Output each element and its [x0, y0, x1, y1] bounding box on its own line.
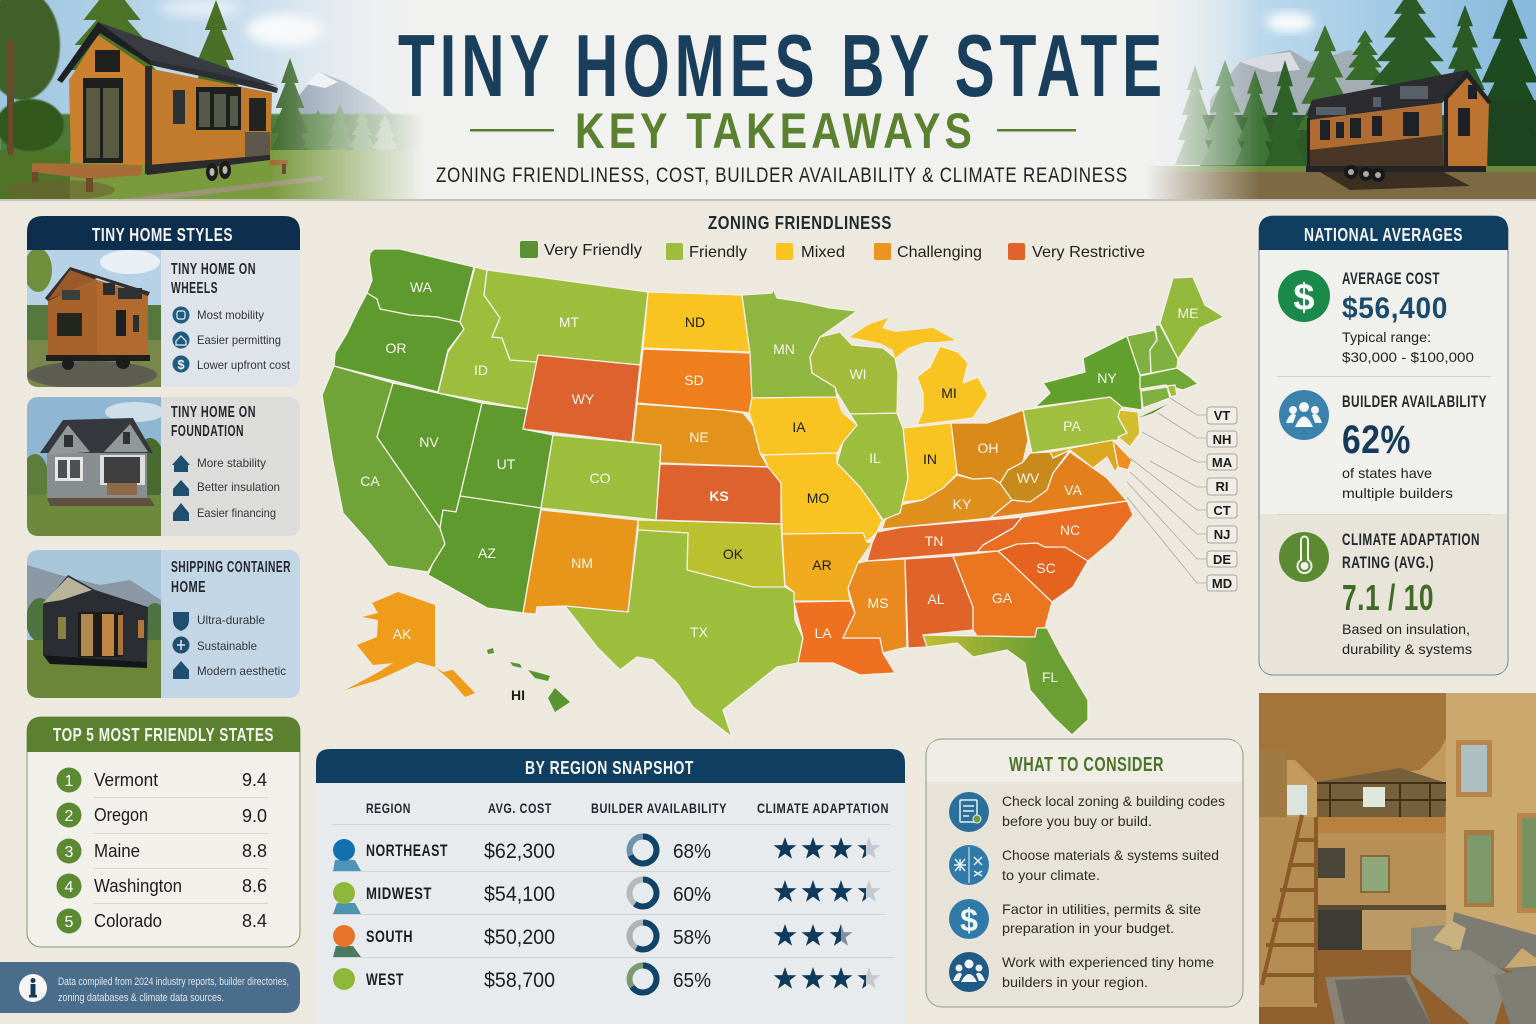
- photo: tiny home on wheels in meadow: [0, 0, 430, 200]
- state abbreviation labels: KY: [953, 496, 972, 512]
- icon: budget: $: [960, 902, 978, 938]
- row: colorado: 8.4: [242, 911, 267, 931]
- heading: by region snapshot: BY REGION SNAPSHOT: [525, 758, 694, 778]
- text: source note: zoning databases & climate data sources.: [58, 992, 224, 1004]
- state abbreviation labels: IL: [869, 450, 881, 466]
- icon: dollar: [172, 356, 190, 372]
- icon: permitting: [172, 332, 190, 348]
- panel: by region snapshot: [316, 749, 905, 1024]
- heading: national averages: NATIONAL AVERAGES: [1304, 225, 1463, 245]
- row: south: 58%: [673, 927, 711, 949]
- text: climate tip: [1002, 847, 1219, 883]
- northeast callout labels with leader lines: NH: [1213, 432, 1231, 447]
- text: foundation title: TINY HOME ON: [171, 404, 256, 421]
- row: washington: [56, 874, 267, 898]
- choropleth map of US states: [322, 249, 1237, 737]
- state abbreviation labels: CA: [360, 473, 380, 489]
- text: foundation title: [171, 404, 256, 440]
- text: budget tip: preparation in your budget.: [1002, 920, 1174, 936]
- text: ultra-durable: Ultra-durable: [197, 613, 265, 627]
- icon: builders: [949, 952, 989, 992]
- table column headers: [366, 800, 889, 816]
- map legend: [520, 241, 1145, 261]
- row: west: [333, 966, 880, 992]
- state abbreviation labels: GA: [992, 590, 1013, 606]
- stat: average cost: $: [1293, 277, 1315, 319]
- heading: top 5: TOP 5 MOST FRIENDLY STATES: [53, 725, 274, 745]
- row: colorado: [56, 908, 267, 934]
- heading: zoning friendliness: ZONING FRIENDLINESS: [708, 213, 892, 233]
- text: wheels title: WHEELS: [171, 280, 218, 297]
- text: more stability: More stability: [197, 456, 266, 470]
- stat: climate adaptation rating: [1279, 530, 1480, 657]
- text: easier financing: Easier financing: [197, 506, 276, 520]
- state abbreviation labels: UT: [497, 456, 516, 472]
- state abbreviation labels: NY: [1097, 370, 1117, 386]
- row: washington: Washington: [94, 876, 182, 896]
- text: container title: [171, 559, 291, 596]
- state abbreviation labels: NC: [1060, 522, 1080, 538]
- row: colorado: Colorado: [94, 911, 162, 931]
- icon: insulation: [173, 480, 189, 496]
- card: tiny home on wheels: [24, 248, 300, 389]
- state abbreviation labels: ND: [685, 314, 705, 330]
- map legend: Friendly: [689, 244, 747, 261]
- text: budget tip: [1002, 901, 1201, 936]
- northeast callout labels with leader lines: VT: [1214, 408, 1230, 423]
- stat: climate adaptation rating: 7.1 / 10: [1342, 577, 1434, 618]
- state abbreviation labels: TX: [690, 624, 709, 640]
- title: TINY HOMES BY STATE: [398, 16, 1167, 115]
- state abbreviation labels: WV: [1017, 470, 1040, 486]
- state abbreviation labels: WI: [849, 366, 867, 382]
- state abbreviation labels: TN: [925, 533, 943, 549]
- state abbreviation labels: NV: [419, 434, 439, 450]
- row: oregon: 2: [65, 808, 74, 825]
- stat: average cost: $30,000 - $100,000: [1342, 349, 1474, 365]
- panel: top 5 most friendly states: [27, 717, 300, 947]
- northeast callout labels with leader lines: DE: [1213, 552, 1231, 567]
- northeast callout labels with leader lines: RI: [1216, 479, 1228, 494]
- row: maine: 3: [65, 844, 74, 861]
- photo: wheeled home: [24, 248, 161, 389]
- row: oregon: [56, 802, 267, 828]
- text: climate tip: to your climate.: [1002, 867, 1100, 883]
- text: zoning tip: Check local zoning & building codes: [1002, 793, 1225, 809]
- northeast callout labels with leader lines: NJ: [1214, 527, 1230, 542]
- row: midwest: $54,100: [484, 883, 555, 906]
- state abbreviation labels: MN: [773, 341, 795, 357]
- state abbreviation labels: ID: [474, 362, 488, 378]
- stat: builder availability: 62%: [1342, 418, 1411, 462]
- tagline: ZONING FRIENDLINESS, COST, BUILDER AVAILABILITY & CLIMATE READINESS: [436, 164, 1128, 187]
- text: wheels title: TINY HOME ON: [171, 261, 256, 278]
- stat: builder availability: of states have: [1342, 465, 1432, 481]
- photo: long tiny home trailer in forest: [1140, 0, 1536, 199]
- row: south: $50,200: [484, 926, 555, 949]
- row: maine: 8.8: [242, 841, 267, 861]
- icon: climate: [949, 845, 989, 885]
- map legend: Very Restrictive: [1032, 244, 1145, 261]
- state abbreviation labels: IA: [792, 419, 806, 435]
- state abbreviation labels: SC: [1036, 560, 1056, 576]
- stat: builder availability: [1279, 390, 1487, 501]
- text: zoning tip: [1002, 793, 1225, 829]
- text: wheels title: [171, 261, 256, 297]
- stat: climate adaptation rating: durability & systems: [1342, 641, 1472, 657]
- state abbreviation labels: WY: [572, 391, 595, 407]
- icon: dollar: $: [177, 357, 185, 372]
- state abbreviation labels: NE: [689, 429, 709, 445]
- state abbreviation labels: AK: [393, 626, 412, 642]
- text: sustainable: Sustainable: [197, 639, 257, 653]
- state abbreviation labels: WA: [410, 279, 433, 295]
- panel: national averages: [1259, 216, 1508, 675]
- text: container title: SHIPPING CONTAINER: [171, 559, 291, 576]
- row: northeast: 68%: [673, 841, 711, 863]
- card: tiny home on foundation: [21, 397, 300, 536]
- row: northeast: $62,300: [484, 840, 555, 863]
- state abbreviation labels: FL: [1042, 669, 1058, 685]
- row: west: $58,700: [484, 969, 555, 992]
- icon: budget: [949, 899, 989, 939]
- text: container title: HOME: [171, 579, 206, 596]
- icon: stability: [172, 455, 190, 472]
- state abbreviation labels: SD: [684, 372, 704, 388]
- row: washington: 4: [65, 879, 74, 896]
- map legend: Challenging: [897, 244, 982, 261]
- table column headers: CLIMATE ADAPTATION: [757, 800, 889, 816]
- row: maine: [56, 838, 267, 864]
- heading: tiny home styles: TINY HOME STYLES: [92, 225, 233, 245]
- photo: tiny home interior: [1259, 693, 1536, 1024]
- icon: financing: [173, 503, 189, 521]
- northeast callout labels with leader lines: MA: [1212, 455, 1233, 470]
- panel: tiny home styles: [21, 216, 300, 698]
- stat: average cost: AVERAGE COST: [1342, 269, 1440, 288]
- photo: container home: [26, 550, 167, 698]
- northeast callout labels with leader lines: CT: [1213, 503, 1231, 518]
- row: west: 65%: [673, 970, 711, 992]
- row: washington: 8.6: [242, 876, 267, 896]
- map legend: Very Friendly: [544, 242, 642, 259]
- table column headers: BUILDER AVAILABILITY: [591, 800, 727, 816]
- icon: mobility: [172, 306, 190, 324]
- state abbreviation labels: AZ: [478, 545, 496, 561]
- row: south: SOUTH: [366, 927, 413, 946]
- stat: average cost: [1278, 269, 1474, 365]
- stat: average cost: $56,400: [1342, 292, 1448, 325]
- subtitle: key takeaways: KEY TAKEAWAYS: [575, 103, 976, 159]
- header banner: [0, 0, 1536, 201]
- text: lower upfront cost: Lower upfront cost: [197, 358, 291, 372]
- panel: what to consider: [926, 739, 1243, 1007]
- state abbreviation labels: CO: [590, 470, 611, 486]
- row: oregon: Oregon: [94, 805, 148, 825]
- text: source note: [58, 976, 289, 1004]
- state abbreviation labels: PA: [1063, 418, 1081, 434]
- stat: average cost: Typical range:: [1342, 329, 1431, 345]
- icon: document: [949, 792, 989, 832]
- state abbreviation labels: MT: [559, 314, 580, 330]
- stat: builder availability: multiple builders: [1342, 485, 1453, 501]
- state abbreviation labels: IN: [923, 451, 937, 467]
- stat: climate adaptation rating: CLIMATE ADAPTATION: [1342, 530, 1480, 549]
- data source note: [0, 962, 300, 1013]
- state abbreviation labels: AL: [927, 591, 945, 607]
- text: budget tip: Factor in utilities, permits & site: [1002, 901, 1201, 917]
- photo: foundation home: [21, 397, 166, 536]
- state abbreviation labels: OK: [723, 546, 744, 562]
- state abbreviation labels: [360, 279, 1198, 703]
- row: midwest: [333, 880, 880, 914]
- row: northeast: NORTHEAST: [366, 841, 448, 860]
- row: vermont: 1: [65, 773, 74, 790]
- row: west: WEST: [366, 970, 404, 989]
- row: midwest: MIDWEST: [366, 884, 432, 903]
- state abbreviation labels: MI: [941, 385, 957, 401]
- row: midwest: 60%: [673, 884, 711, 906]
- text: builders tip: [1002, 954, 1214, 990]
- state abbreviation labels: ME: [1178, 305, 1198, 321]
- text: foundation title: FOUNDATION: [171, 423, 244, 440]
- row: maine: Maine: [94, 841, 140, 861]
- state abbreviation labels: MO: [807, 490, 829, 506]
- state abbreviation labels: AR: [812, 557, 832, 573]
- row: south: [333, 922, 852, 957]
- icon: durable: [173, 612, 189, 631]
- row: northeast: [333, 836, 880, 871]
- text: builders tip: builders in your region.: [1002, 974, 1148, 990]
- text: most mobility: Most mobility: [197, 308, 264, 322]
- icon: sustainable: [172, 636, 190, 654]
- stat: climate adaptation rating: Based on insulation,: [1342, 621, 1470, 637]
- card: shipping container home: [26, 550, 300, 698]
- state abbreviation labels: OR: [386, 340, 406, 356]
- row: colorado: 5: [65, 914, 74, 931]
- state abbreviation labels: NM: [571, 555, 593, 571]
- row: oregon: 9.0: [242, 806, 267, 826]
- text: source note: Data compiled from 2024 industry reports, builder directories,: [58, 976, 289, 988]
- state abbreviation labels: LA: [814, 625, 832, 641]
- northeast callout labels with leader lines: MD: [1212, 576, 1232, 591]
- house body: [69, 35, 147, 165]
- icon: info: [19, 974, 47, 1002]
- sofa: [1411, 912, 1536, 1024]
- northeast callout labels with leader lines: [1127, 398, 1237, 591]
- state abbreviation labels: VA: [1064, 482, 1082, 498]
- state abbreviation labels: KS: [709, 488, 729, 504]
- icon: modern: [173, 661, 189, 679]
- table column headers: AVG. COST: [488, 800, 552, 816]
- row: vermont: 9.4: [242, 770, 267, 790]
- text: zoning tip: before you buy or build.: [1002, 813, 1152, 829]
- state abbreviation labels: MS: [868, 595, 888, 611]
- text: better insulation: Better insulation: [197, 480, 280, 494]
- text: builders tip: Work with experienced tiny home: [1002, 954, 1214, 970]
- text: modern aesthetic: Modern aesthetic: [197, 664, 286, 678]
- text: easier permitting: Easier permitting: [197, 333, 281, 347]
- text: climate tip: Choose materials & systems suited: [1002, 847, 1219, 863]
- map legend: Mixed: [801, 244, 845, 261]
- row: vermont: Vermont: [94, 770, 158, 790]
- table column headers: REGION: [366, 800, 411, 816]
- heading: what to consider: WHAT TO CONSIDER: [1009, 754, 1164, 776]
- state abbreviation labels: OH: [978, 440, 998, 456]
- state abbreviation labels: HI: [511, 687, 525, 703]
- stat: climate adaptation rating: RATING (AVG.): [1342, 553, 1434, 572]
- row: vermont: [56, 768, 267, 792]
